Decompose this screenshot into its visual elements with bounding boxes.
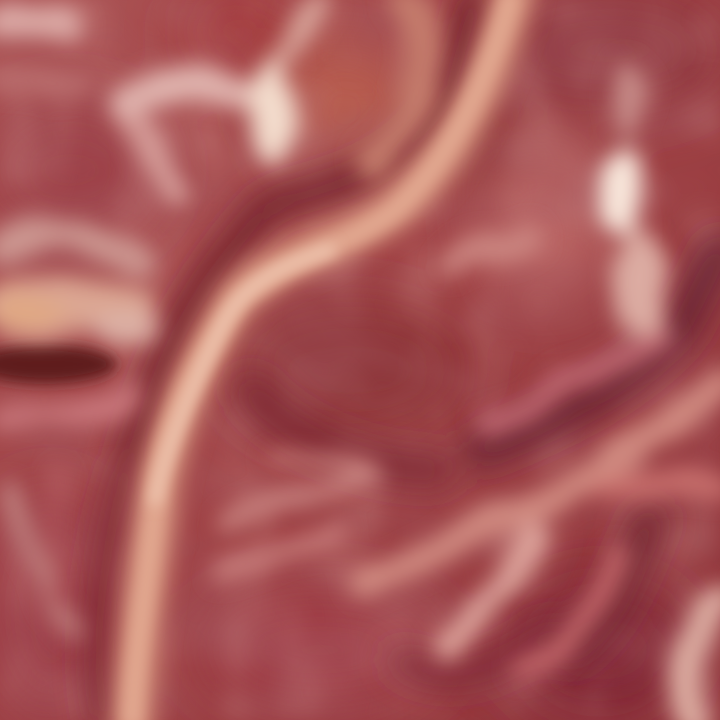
faint centre streaks: [215, 235, 530, 570]
pale streaks upper left: [0, 0, 422, 260]
dark fold at left edge: [0, 344, 117, 384]
left lower streaks: [0, 395, 125, 630]
main vessel: [132, 0, 515, 720]
lower right branching vessels: [365, 385, 720, 720]
peach patch left: [0, 273, 163, 350]
cream highlight upper centre: [250, 62, 294, 162]
right vessel purple: [490, 340, 655, 425]
cream highlight right: [600, 53, 666, 337]
